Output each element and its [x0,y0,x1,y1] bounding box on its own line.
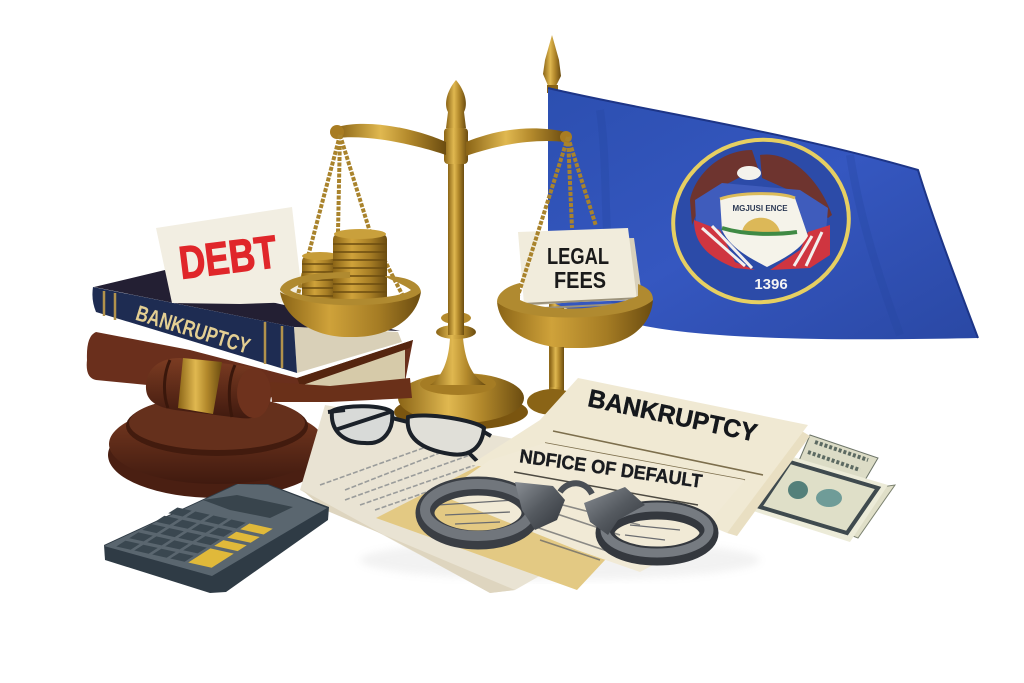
seal year: 1396 [754,276,788,293]
calculator keys [116,507,273,568]
shadow under documents [360,540,760,580]
debt card: DEBT [176,225,280,289]
yellow folder [376,465,745,590]
shield [720,194,808,267]
left pan bowl [280,272,421,337]
eagle wings [690,150,832,225]
book: brown [87,332,413,400]
legal fees card stack: FEES [554,267,606,293]
chains: left pan [296,135,405,302]
shield: MGJUSI ENCE [732,204,788,213]
book spine title: BANKRUPTCY [133,300,253,359]
left cuff [425,482,565,540]
handcuffs [425,482,709,556]
legal fees card stack [518,228,642,309]
heading: notice of default: NDFICE OF DEFAULT [518,446,704,493]
calculator [104,484,329,593]
flag of Utah [548,88,978,339]
legal fees card stack: LEGAL [547,243,609,269]
seal ring [660,126,862,316]
chain [560,483,592,494]
paper: left stacked document with handwriting [300,405,620,593]
gavel and sound block [108,358,412,498]
heading: bankruptcy: BANKRUPTCY [586,384,760,448]
coin stacks [302,229,387,309]
money bills [750,435,895,542]
paper: bankruptcy and notice of default [440,378,810,572]
book: navy bankruptcy [92,270,402,373]
glasses [328,406,491,461]
chains: right pan [516,137,596,302]
calculator screen [203,495,293,518]
flags beside shield [694,183,830,270]
flag pole and finial [527,35,579,415]
debt card [156,207,301,304]
right pan bowl [497,283,653,387]
right cuff [584,487,709,556]
scales: stand [330,80,572,430]
